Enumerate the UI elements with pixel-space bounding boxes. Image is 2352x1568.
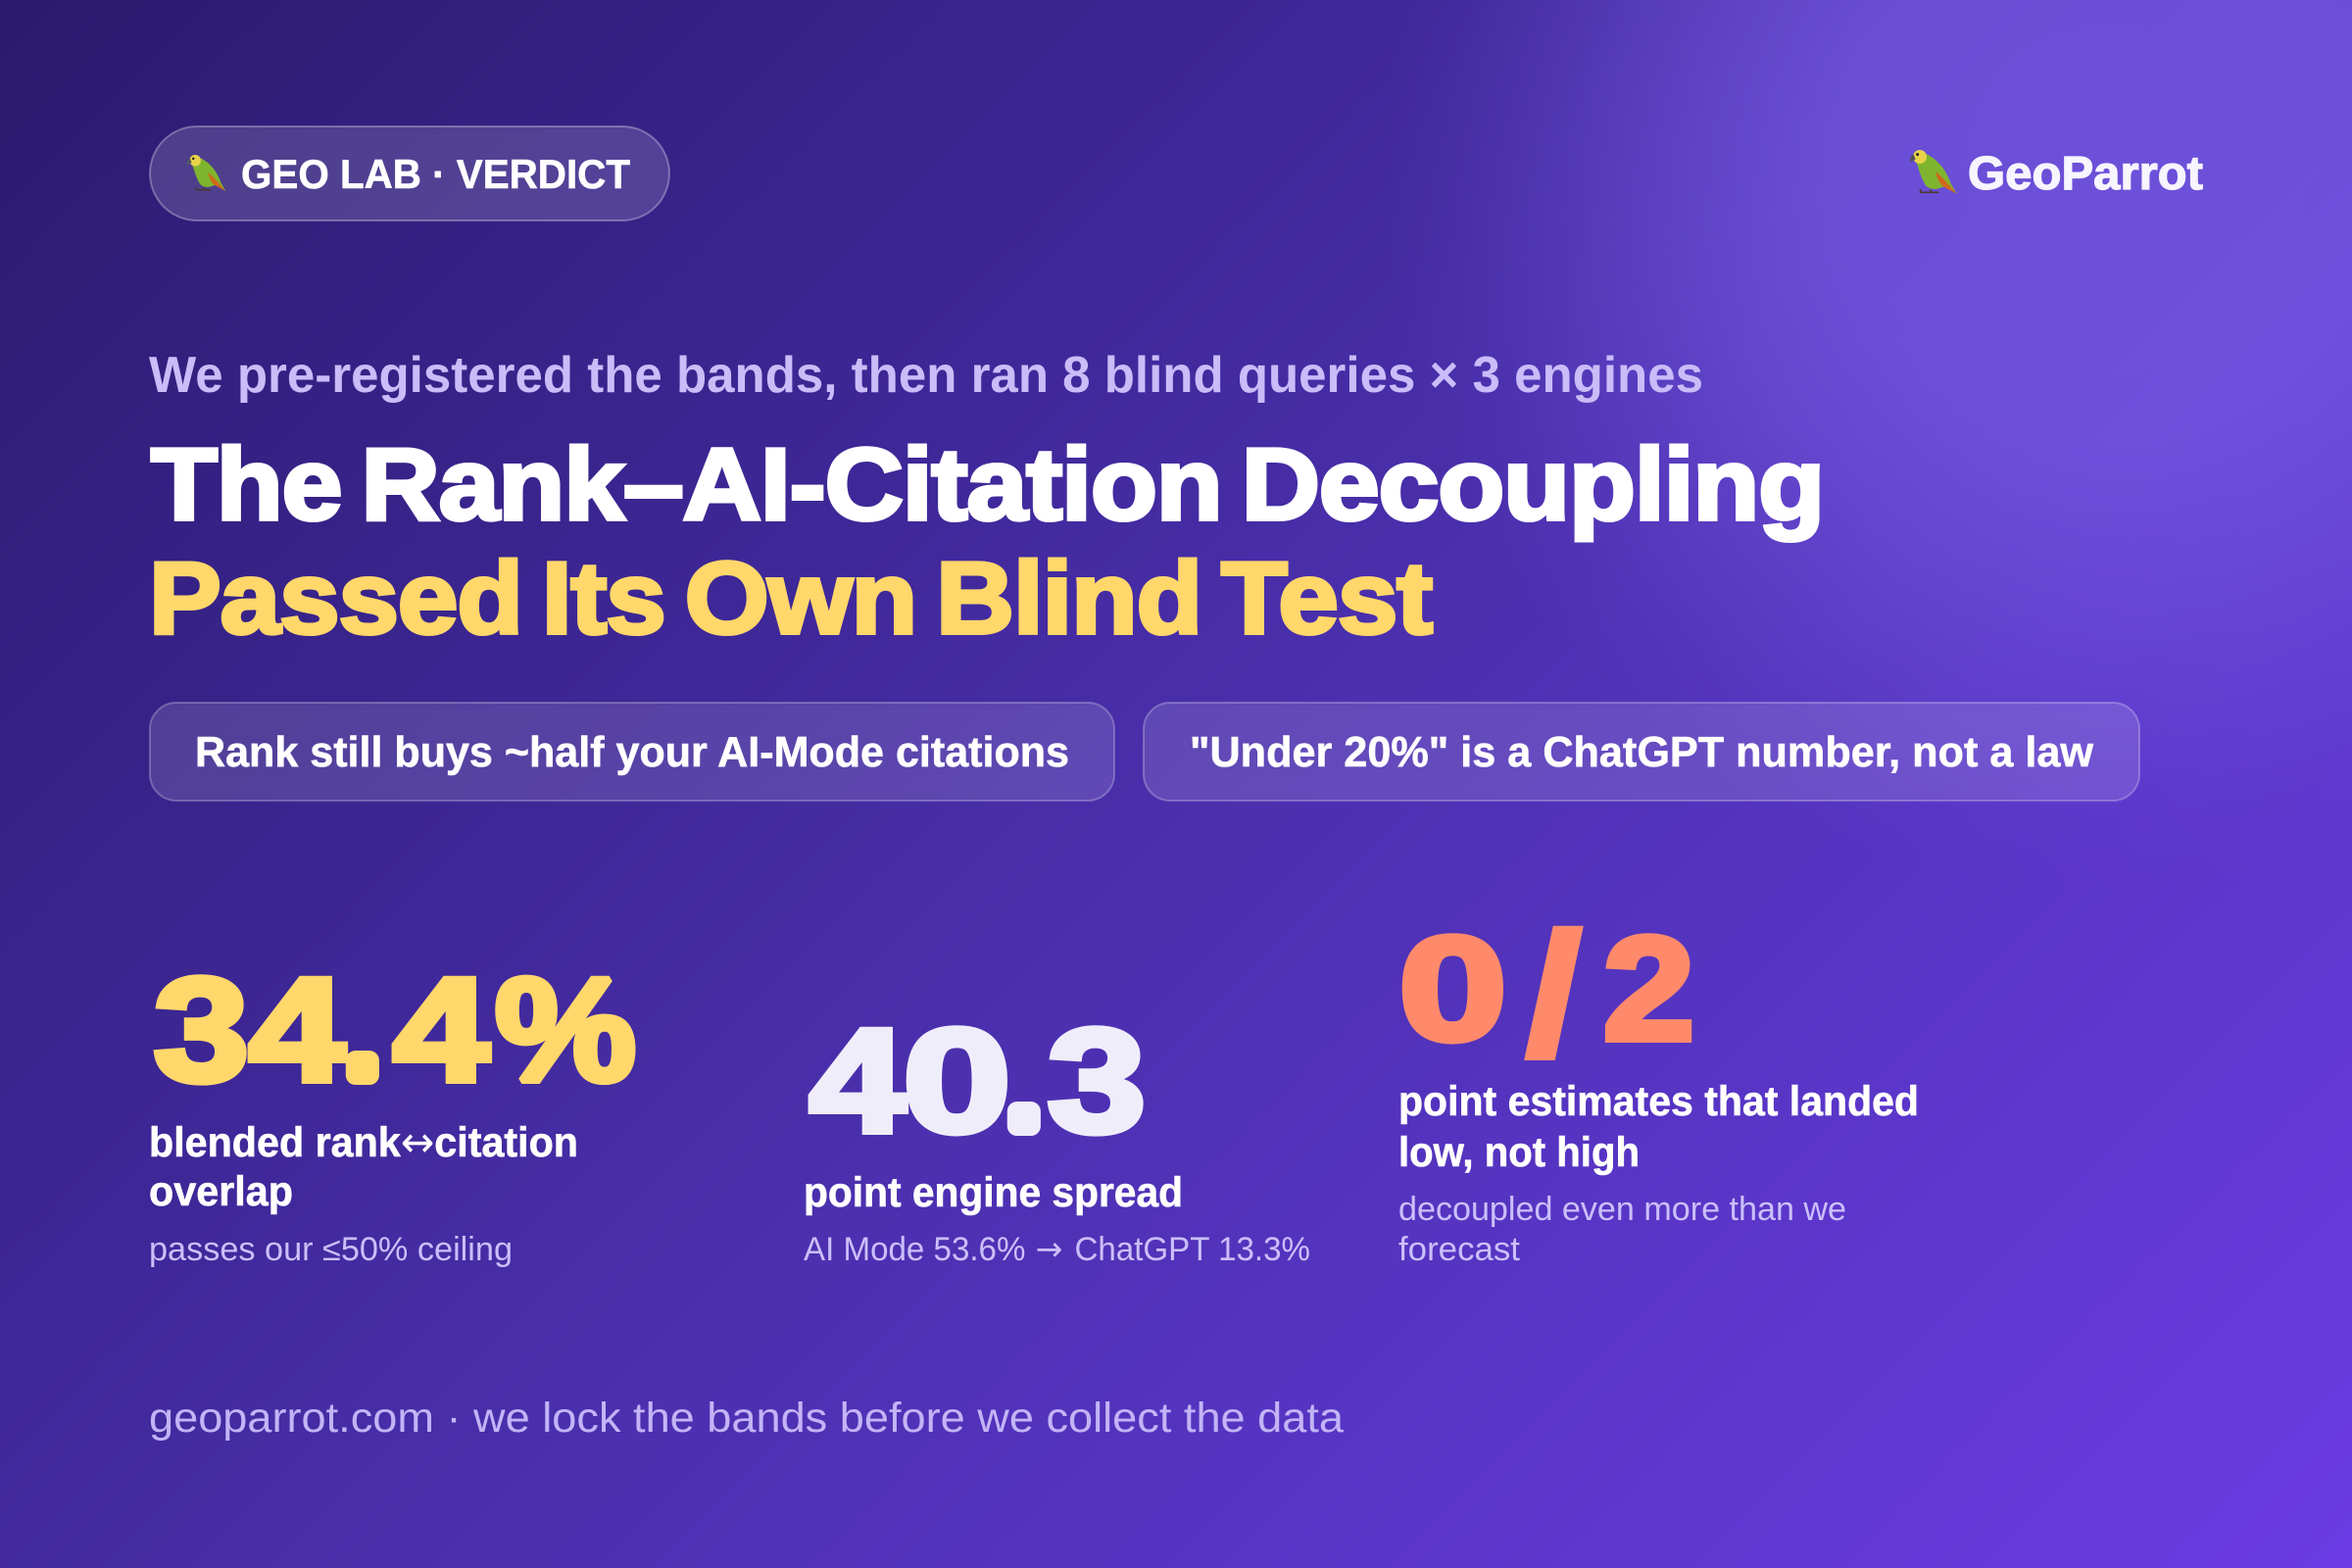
stat note: passes our ≤50% ceiling [149,1231,513,1268]
big number: . [349,987,376,1097]
big number: 4 [249,947,345,1111]
title [149,428,1824,656]
big number: . [1010,1038,1038,1148]
big number: 4 [809,998,906,1162]
stat: 0/2: low, not high [1398,1129,1640,1176]
stat note: decoupled even more than we [1398,1191,1846,1228]
big number: 0 [904,998,1011,1162]
stat: 40.3 [804,998,1310,1269]
chip: under 20% claim [1144,703,2139,801]
title line 1: The Rank–AI-Citation Decoupling [151,428,1824,542]
chip: rank claim: Rank still buys ~half your AI-Mode citations [195,728,1069,776]
stat: 0/2: forecast [1398,1231,1521,1268]
big number: / [1527,900,1581,1091]
stat note: AI Mode 53.6% → ChatGPT 13.3% [804,1230,1310,1269]
badge: GEO Lab verdict [150,126,669,220]
big number: 3 [1048,998,1146,1162]
big number: 4 [393,947,489,1111]
kicker text: We pre-registered the bands, then ran 8 blind queries × 3 engines [149,347,1703,404]
big number: 0 [1399,906,1507,1070]
stat: 34.4% [149,947,636,1268]
big number: 2 [1603,906,1694,1070]
brand name: GeoParrot [1968,148,2203,200]
big number: % [495,947,636,1111]
stat: 0/2 [1398,900,1919,1268]
badge text: GEO LAB · VERDICT [241,151,630,197]
chip: under 20% claim: "Under 20%" is a ChatGPT number, not a law [1190,728,2094,776]
title line 2: Passed Its Own Blind Test [149,542,1432,656]
big number: 3 [154,947,249,1111]
footer text: geoparrot.com · we lock the bands before we collect the data [149,1395,1344,1442]
icon: parrot [187,155,225,191]
stat label: blended rank↔citation [149,1118,578,1167]
stat label: point estimates that landed [1398,1078,1919,1125]
stat label: point engine spread [804,1169,1183,1216]
icon: parrot [1910,150,1957,194]
stat: 34.4%: overlap [149,1168,293,1215]
chip: rank claim [150,703,1114,801]
brand logo [1910,148,2203,200]
